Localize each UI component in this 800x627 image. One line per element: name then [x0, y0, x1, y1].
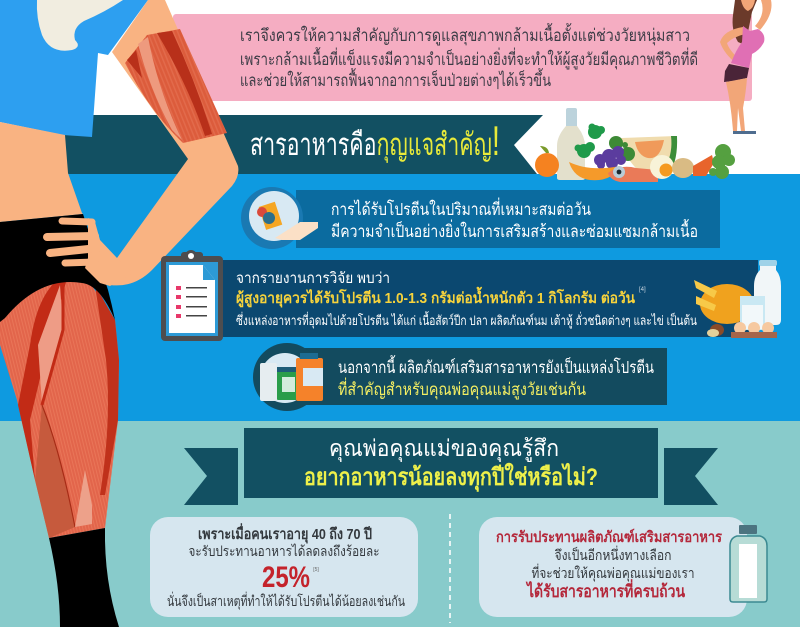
supplement text: นอกจากนี้ ผลิตภัณฑ์เสริมสารอาหารยังเป็นแหล่งโปรตีน	[338, 355, 654, 377]
icon: supplement bottle	[730, 525, 767, 602]
background: blue middle section	[0, 174, 800, 421]
arm	[100, 0, 238, 285]
panel: reduced intake	[150, 517, 418, 617]
question text	[304, 435, 598, 493]
thigh muscles	[0, 280, 119, 538]
chicken	[700, 284, 754, 324]
panel: research finding	[218, 260, 758, 337]
reduced intake text: นั่นจึงเป็นสาเหตุที่ทำให้ได้รับโปรตีนได้น้อยลงเช่นกัน	[167, 592, 405, 610]
research text: จากรายงานการวิจัย พบว่า	[236, 270, 390, 287]
heading text: สารอาหารคือกุญแจสำคัญ!	[250, 117, 500, 164]
icon: clipboard	[161, 250, 223, 341]
supplement option text: การรับประทานผลิตภัณฑ์เสริมสารอาหาร	[496, 528, 723, 546]
shorts	[0, 214, 115, 322]
reduced intake text: 25%	[262, 561, 310, 594]
orange	[535, 146, 559, 177]
ribbon: question banner	[184, 428, 718, 505]
supplement option text: ที่จะช่วยให้คุณพ่อคุณแม่ของเรา	[532, 564, 694, 582]
protein text	[331, 197, 698, 241]
potato	[672, 158, 694, 178]
dashed divider	[449, 514, 451, 623]
hair	[733, 0, 757, 45]
supplement text	[338, 355, 654, 400]
panel: protein need	[241, 187, 720, 249]
carrot	[693, 155, 714, 176]
sock	[49, 528, 119, 627]
intro text: เราจึงควรให้ความสำคัญกับการดูแลสุขภาพกล้ามเนื้อตั้งแต่ช่วงวัยหนุ่มสาว	[240, 23, 690, 46]
intro text	[240, 23, 698, 90]
supplement option text: จึงเป็นอีกหนึ่งทางเลือก	[554, 546, 672, 563]
protein text: การได้รับโปรตีนในปริมาณที่เหมาะสมต่อวัน	[331, 197, 591, 219]
panel: pink intro	[173, 14, 752, 101]
question text: อยากอาหารน้อยลงทุกปีใช่หรือไม่?	[304, 462, 598, 493]
icon: woman exercising	[720, 0, 772, 134]
reduced intake text: เพราะเมื่อคนเราอายุ 40 ถึง 70 ปี	[198, 523, 372, 544]
research text	[236, 270, 697, 329]
hand	[47, 218, 133, 286]
heading ribbon: nutrition is key	[65, 115, 543, 174]
milk bottle	[754, 261, 781, 325]
glass	[740, 296, 765, 330]
egg	[650, 155, 674, 179]
panel: supplement option	[479, 517, 747, 617]
top	[731, 26, 764, 68]
shoes	[733, 131, 756, 134]
nuts	[710, 324, 724, 336]
leaves and grapes	[574, 124, 635, 169]
icon: chicken, milk and eggs	[694, 260, 781, 338]
shirt	[0, 0, 148, 137]
background: teal bottom section	[0, 421, 800, 627]
legs	[726, 78, 747, 131]
research text: [4]	[639, 287, 646, 293]
reduced intake text: จะรับประทานอาหารได้ลดลงถึงร้อยละ	[188, 543, 380, 559]
face	[741, 0, 755, 11]
fingers	[47, 221, 98, 263]
protein text: มีความจำเป็นอย่างยิ่งในการเสริมสร้างและซ่อมแซมกล้ามเนื้อ	[331, 219, 698, 241]
reduced intake text	[167, 523, 405, 610]
question text: คุณพ่อคุณแม่ของคุณรู้สึก	[329, 435, 559, 462]
icon: food group	[535, 108, 735, 182]
hair tip	[37, 0, 123, 51]
background: white top section	[0, 0, 800, 174]
supplement text: ที่สำคัญสำหรับคุณพ่อคุณแม่สูงวัยเช่นกัน	[338, 377, 586, 400]
research text: ผู้สูงอายุควรได้รับโปรตีน 1.0-1.3 กรัมต่อน้ำหนักตัว 1 กิโลกรัม ต่อวัน	[236, 286, 636, 308]
greens	[709, 144, 735, 179]
waist arm	[720, 27, 745, 64]
supplement option text: ได้รับสารอาหารที่ครบถ้วน	[525, 579, 685, 601]
reduced intake text: [5]	[313, 567, 319, 573]
supplement option text	[496, 528, 723, 601]
figure: woman body with muscles	[0, 0, 238, 627]
waist	[0, 122, 83, 222]
banana	[569, 162, 620, 180]
icon: arm with gears	[241, 187, 318, 249]
milk bottle	[557, 108, 585, 180]
shorts	[724, 64, 749, 82]
arm muscle	[125, 29, 227, 143]
melon	[621, 136, 677, 172]
icon: supplement bottles	[253, 343, 323, 411]
intro text: และช่วยให้สามารถฟื้นจากอาการเจ็บป่วยต่างๆได้เร็วขึ้น	[240, 68, 551, 90]
fish	[608, 166, 658, 182]
eggs in tray	[734, 322, 746, 334]
panel: supplements	[253, 343, 667, 411]
palm	[85, 218, 133, 286]
raised arm	[755, 0, 772, 30]
